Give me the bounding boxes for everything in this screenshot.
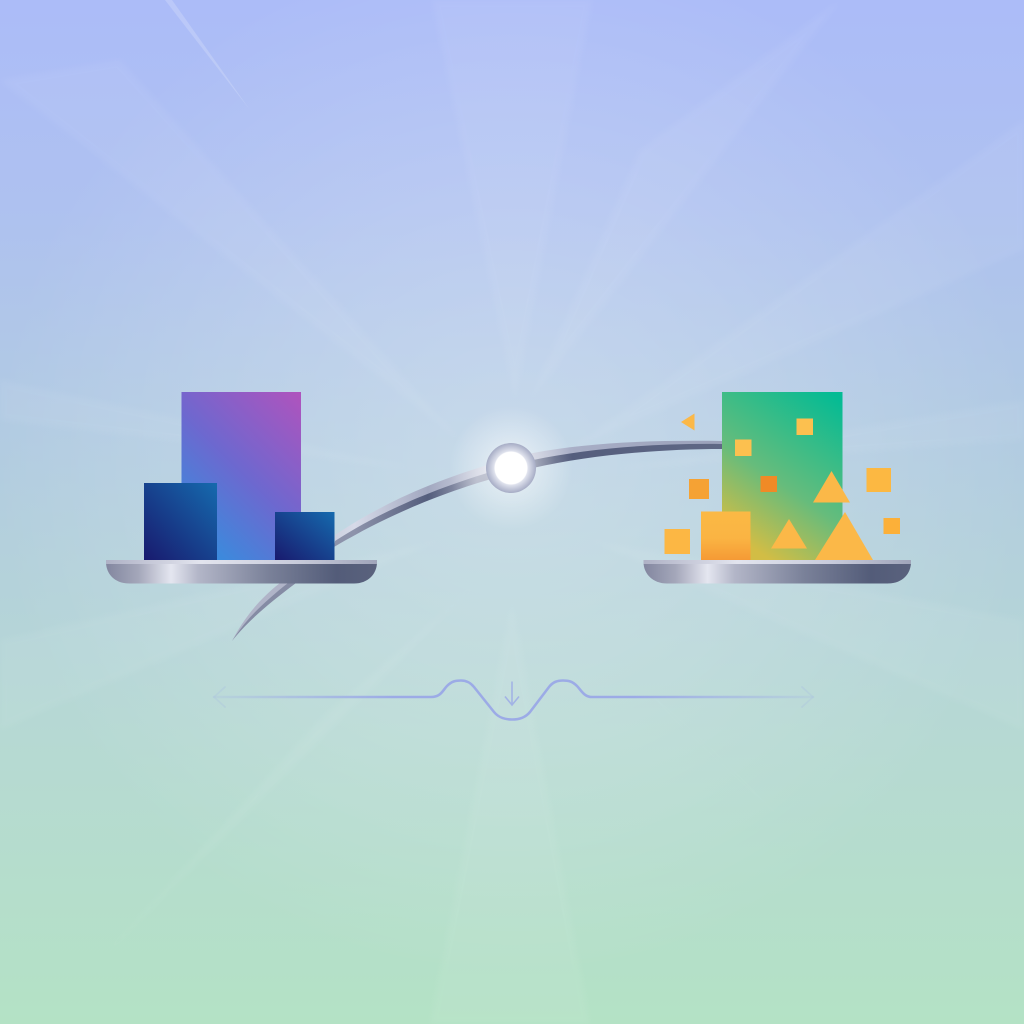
right stack: orange triangles	[681, 414, 873, 560]
pivot glow	[449, 406, 573, 530]
right stack: scattered orange squares	[664, 418, 900, 554]
left stack: tall purple block	[182, 392, 301, 560]
left stack: small navy block	[275, 512, 334, 560]
down arrow	[505, 682, 519, 705]
left stack: large navy block	[144, 483, 217, 560]
right stack: large orange square	[701, 512, 750, 560]
wave line with arrows	[214, 680, 813, 720]
right tray	[644, 560, 911, 584]
balance beam	[232, 441, 722, 641]
left tray	[106, 560, 377, 584]
right stack: tall green block	[722, 392, 842, 560]
pivot knob	[486, 443, 536, 493]
